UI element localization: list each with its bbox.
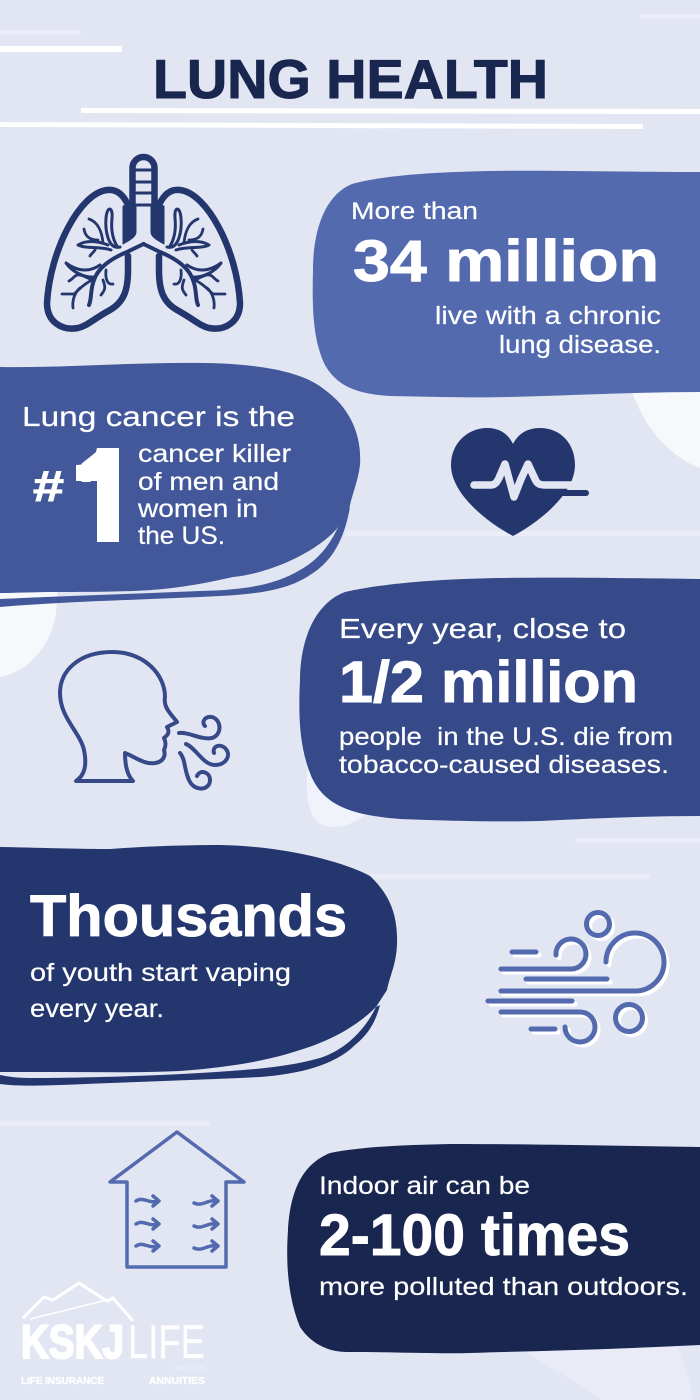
panel: number one cancer killer: 1 [78,423,138,570]
panel: number one cancer killer [0,363,360,607]
icon: heart with pulse [451,428,586,536]
panel: 34 million: lung disease. [499,331,661,359]
panel: indoor air: 2-100 times [319,1203,630,1268]
icon: lungs [47,157,240,329]
icon: head exhaling [60,652,228,789]
logo: KSKJ Life: LIFE [128,1315,205,1368]
panel: thousands: of youth start vaping [30,959,291,987]
logo: KSKJ Life: ANNUITIES [149,1376,205,1387]
panel: half a million: tobacco-caused diseases. [339,751,669,779]
background blobs [0,385,700,1400]
logo: KSKJ Life: since 1894 [172,1365,205,1372]
panel: half a million [299,578,700,821]
panel: number one cancer killer: women in [137,495,258,523]
icon: wind [488,912,667,1045]
panel: half a million: people in the U.S. die from [339,723,673,751]
logo: KSKJ Life: KSKJ [21,1315,124,1368]
logo: KSKJ Life: LIFE INSURANCE [21,1376,104,1387]
panel: indoor air [287,1144,700,1353]
panel: half a million: Every year, close to [339,613,626,644]
panel: thousands [0,845,397,1086]
panel: 34 million [313,171,700,397]
panel: thousands: Thousands [30,884,347,949]
logo: KSKJ Life [21,1283,205,1387]
panel: number one cancer killer: the US. [138,522,225,550]
panel: number one cancer killer: # [33,462,64,511]
panel: number one cancer killer: cancer killer [138,440,291,468]
panel: thousands: every year. [30,995,164,1023]
panel: indoor air: Indoor air can be [319,1172,530,1200]
panel: 34 million: More than [351,198,478,225]
panel: 34 million: 34 million [353,229,659,294]
panel: 34 million: live with a chronic [435,302,661,330]
background streaks [0,14,700,1126]
title: LUNG HEALTH [153,48,548,110]
panel: number one cancer killer: of men and [138,468,279,496]
icon: house with air arrows [110,1132,244,1267]
panel: number one cancer killer: Lung cancer is the [22,401,295,432]
panel: half a million: 1/2 million [339,650,638,715]
panel: indoor air: more polluted than outdoors. [319,1273,688,1301]
